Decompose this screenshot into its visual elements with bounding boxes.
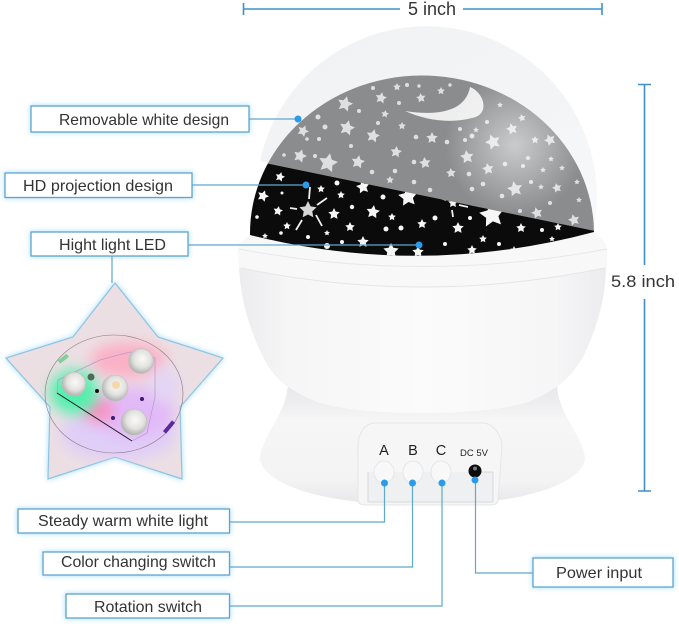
grey section dots: [282, 83, 552, 213]
button letters: DC 5V: [460, 448, 489, 459]
bowl of lamp: [239, 265, 606, 413]
control panel: [358, 423, 502, 505]
label: power input: Power input: [556, 565, 643, 582]
label: power input: [472, 476, 673, 587]
width dimension line: [244, 0, 602, 19]
label: steady warm white light: Steady warm white light: [38, 513, 209, 530]
label: hight light LED: Hight light LED: [59, 237, 166, 254]
label: color changing switch: [43, 480, 416, 575]
removable white shell: [260, 26, 597, 232]
label: removable white design: [31, 106, 302, 132]
star LED board: [6, 283, 223, 479]
buttons: [374, 461, 451, 483]
LED bulbs: [62, 348, 154, 435]
label: color changing switch: Color changing switch: [61, 554, 216, 571]
button letters: B: [408, 443, 418, 459]
label: hight light LED: [31, 232, 422, 283]
coloured light glow: [50, 342, 179, 461]
grey section stars: [292, 83, 582, 226]
black section dots: [255, 180, 563, 249]
circuit board outline: [45, 335, 183, 453]
black section stars: [258, 172, 562, 256]
starburst rays: [290, 187, 468, 230]
grey upper dome: [268, 76, 594, 231]
crescent moon: [405, 87, 484, 121]
button letters: C: [436, 443, 446, 459]
black lower dome: [250, 164, 594, 256]
board details: [58, 354, 175, 434]
foot of lamp: [260, 385, 585, 505]
button letters: A: [379, 443, 389, 459]
label: steady warm white light: [18, 480, 388, 533]
rim of lamp: [238, 232, 607, 288]
label: HD projection design: [5, 173, 310, 198]
power socket: [468, 464, 482, 478]
label: HD projection design: HD projection design: [23, 178, 173, 195]
label: rotation switch: [66, 480, 446, 618]
height label: 5.8 inch: [611, 272, 675, 291]
height dimension line: [611, 84, 675, 491]
button letters: [379, 443, 489, 459]
label: removable white design: Removable white design: [59, 112, 229, 129]
lamp body: [238, 26, 607, 505]
projection dome: [250, 76, 594, 256]
label: rotation switch: Rotation switch: [94, 599, 202, 616]
warm LED core: [112, 381, 120, 389]
